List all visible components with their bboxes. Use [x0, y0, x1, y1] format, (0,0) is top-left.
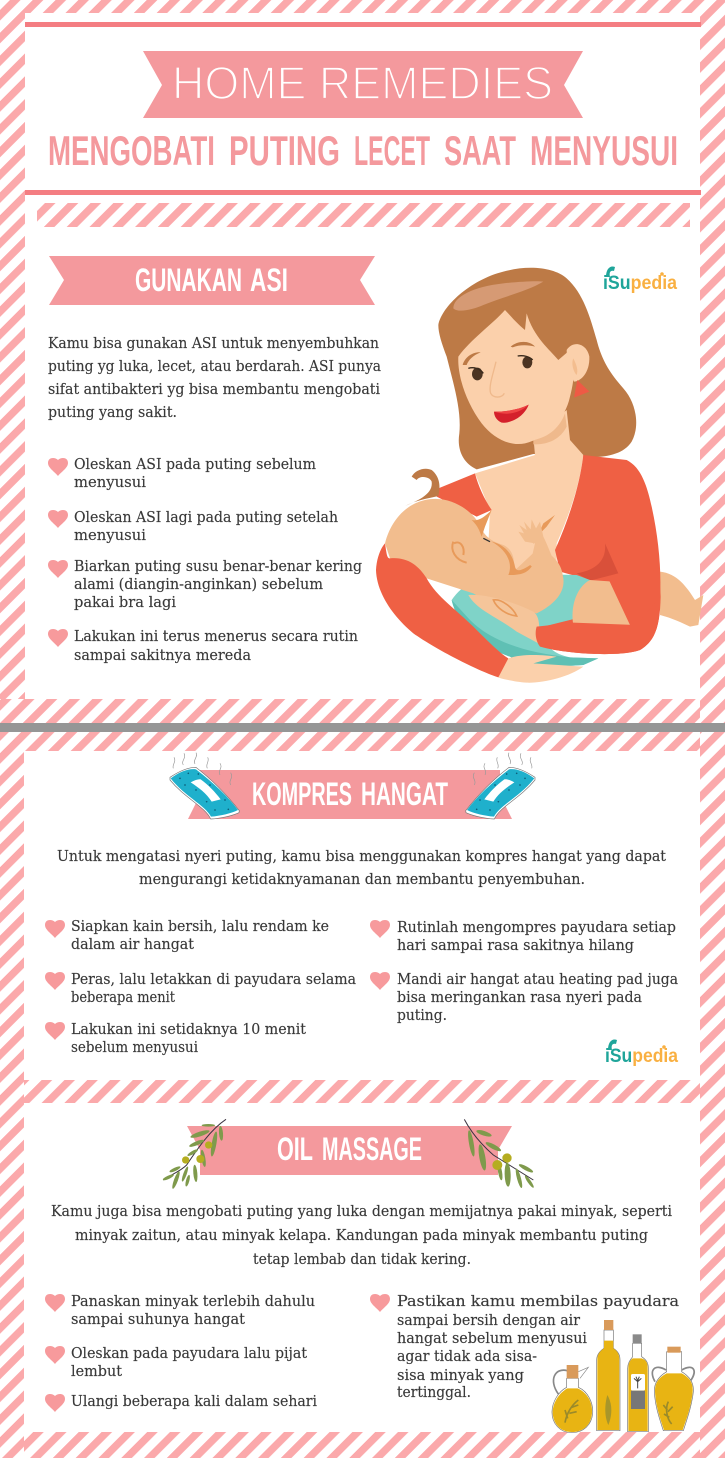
heading: gunakan ASI: ASI	[250, 262, 288, 298]
intro paragraph: oil	[51, 1202, 672, 1268]
bullet list: oil right: Pastikan kamu membilas payudara	[397, 1292, 679, 1310]
bullet list: kompres left: Siapkan kain bersih, lalu rendam ke	[71, 917, 329, 935]
bullet list: kompres right: bisa meringankan rasa nyeri pada	[397, 988, 642, 1006]
title banner: HOME REMEDIES	[172, 57, 553, 109]
bullet list: oil left: Oleskan pada payudara lalu pijat	[71, 1344, 307, 1362]
subtitle: MENGOBATI	[48, 127, 215, 174]
bullet list: oil left: Ulangi beberapa kali dalam sehari	[71, 1392, 317, 1410]
grey divider band	[0, 723, 725, 732]
bullet list: kompres left: beberapa menit	[71, 988, 175, 1006]
bullet list: oil right: hangat sebelum menyusui	[397, 1329, 587, 1347]
illustration: mother breastfeeding baby	[376, 268, 703, 683]
bullet list: ASI: sampai sakitnya mereda	[74, 646, 251, 664]
subtitle: SAAT	[444, 127, 516, 174]
bullet list: oil left: sampai suhunya hangat	[71, 1310, 245, 1328]
subtitle	[48, 127, 678, 174]
intro paragraph: oil: Kamu juga bisa mengobati puting yang luka dengan memijatnya pakai minyak, seperti	[51, 1202, 672, 1220]
bullet list: ASI: pakai bra lagi	[74, 593, 176, 611]
bullet list: ASI: Oleskan ASI pada puting sebelum	[74, 455, 316, 473]
bullet list: oil right: agar tidak ada sisa-	[397, 1347, 537, 1365]
bullet list: oil right: tertinggal.	[397, 1383, 471, 1401]
bullet list: oil right	[370, 1292, 679, 1401]
bullet list: ASI: Biarkan puting susu benar-benar kering	[74, 557, 362, 575]
bullet list: oil left: Panaskan minyak terlebih dahulu	[71, 1292, 315, 1310]
bullet list: kompres right: Mandi air hangat atau heating pad juga	[397, 970, 678, 988]
subtitle: PUTING	[229, 127, 340, 174]
bullet list: ASI: menyusui	[74, 526, 146, 544]
heading: oil massage: MASSAGE	[322, 1131, 422, 1167]
heading: kompres hangat: KOMPRES	[252, 776, 352, 812]
bullet list: kompres left: dalam air hangat	[71, 935, 194, 953]
icon: left olive branch	[162, 1119, 226, 1189]
bottom header rule	[25, 190, 701, 195]
bullet list: ASI: alami (diangin-anginkan) sebelum	[74, 575, 323, 593]
heading: oil massage: OIL	[277, 1131, 313, 1167]
heading: kompres hangat	[188, 770, 512, 819]
bullet list: kompres right: puting.	[397, 1006, 447, 1024]
intro paragraph: oil: minyak zaitun, atau minyak kelapa. Kandungan pada minyak membantu puting	[75, 1226, 648, 1244]
intro paragraph: oil: tetap lembab dan tidak kering.	[253, 1250, 471, 1268]
bullet list: kompres left	[45, 917, 356, 1056]
intro paragraph: ASI	[48, 334, 381, 421]
heading: oil massage	[187, 1126, 512, 1175]
intro paragraph: ASI: puting yg luka, lecet, atau berdarah. ASI punya	[48, 357, 381, 375]
bullet list: oil left: lembut	[71, 1362, 122, 1380]
logo: iSupedia middle: iSupedia	[605, 1046, 678, 1067]
intro paragraph: kompres: mengurangi ketidaknyamanan dan membantu penyembuhan.	[139, 870, 585, 888]
intro paragraph: ASI: Kamu bisa gunakan ASI untuk menyembuhkan	[48, 334, 379, 352]
icon: left heat pad	[170, 753, 239, 819]
heading: gunakan ASI: GUNAKAN	[135, 262, 242, 298]
intro paragraph: kompres: Untuk mengatasi nyeri puting, kamu bisa menggunakan kompres hangat yang dapat	[57, 847, 666, 865]
bullet list: kompres right	[370, 918, 678, 1024]
bullet list: oil right: sisa minyak yang	[397, 1366, 524, 1384]
bullet list: oil left	[45, 1292, 317, 1412]
title banner	[143, 51, 583, 118]
bullet list: oil right: sampai bersih dengan air	[397, 1311, 581, 1329]
bullet list: ASI: Lakukan ini terus menerus secara rutin	[74, 627, 358, 645]
bullet list: ASI: menyusui	[74, 473, 146, 491]
intro paragraph: ASI: sifat antibakteri yg bisa membantu mengobati	[48, 380, 380, 398]
bullet list: kompres right: Rutinlah mengompres payudara setiap	[397, 918, 676, 936]
icon: right olive branch	[464, 1119, 535, 1189]
bullet list: kompres left: Peras, lalu letakkan di payudara selama	[71, 970, 356, 988]
heading: gunakan ASI	[49, 256, 375, 305]
bullet list: ASI: Oleskan ASI lagi pada puting setelah	[74, 508, 338, 526]
logo: iSupedia top: iSupedia	[603, 273, 677, 294]
top rule	[25, 22, 701, 27]
heading: kompres hangat: HANGAT	[361, 776, 448, 812]
illustration: olive oil bottles	[552, 1320, 694, 1433]
bullet list: kompres left: Lakukan ini setidaknya 10 menit	[71, 1020, 306, 1038]
intro paragraph: ASI: puting yang sakit.	[48, 403, 177, 421]
bullet list: kompres left: sebelum menyusui	[71, 1038, 198, 1056]
intro paragraph: kompres	[57, 847, 666, 888]
icon: right heat pad	[466, 753, 535, 819]
subtitle: LECET	[354, 127, 430, 174]
bullet list: kompres right: hari sampai rasa sakitnya hilang	[397, 936, 634, 954]
bullet list: ASI	[48, 455, 362, 664]
